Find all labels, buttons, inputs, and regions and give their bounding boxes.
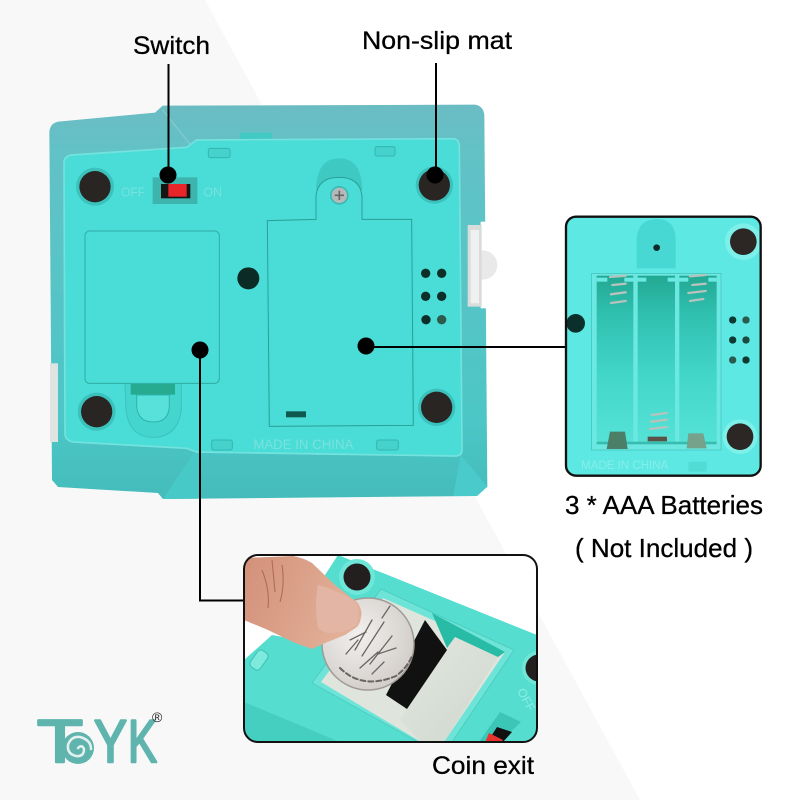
- small tab: [688, 462, 707, 472]
- stamp: MADE IN CHINA: [581, 458, 668, 472]
- device corner: [244, 555, 537, 742]
- coin door latch: [125, 383, 181, 437]
- foot right: [522, 652, 536, 684]
- MADE IN CHINA stamp: MADE IN CHINA: [253, 436, 354, 452]
- thumbnail: [316, 585, 359, 633]
- central hole: [237, 267, 259, 289]
- screw recess: [316, 158, 362, 190]
- OFF mark: OFF: [514, 686, 538, 714]
- ON label: ON: [203, 185, 222, 200]
- label: Non-slip mat: Non-slip mat: [362, 27, 512, 55]
- small moulded tabs: [208, 147, 398, 450]
- spring right: [688, 275, 706, 301]
- logo: TOYK: [37, 708, 163, 775]
- side hole: [566, 314, 585, 333]
- coin: [322, 598, 414, 690]
- label: Coin exit: Coin exit: [432, 752, 534, 780]
- finger: [244, 556, 362, 649]
- callout: switch: [160, 64, 176, 184]
- foot bottom: [723, 419, 757, 454]
- contact centre: [648, 437, 667, 441]
- rubber feet: [76, 166, 455, 431]
- device: underside of coin bank: [49, 105, 497, 499]
- label: ( Not Included ): ( Not Included ): [575, 533, 753, 563]
- spring centre: [648, 413, 667, 440]
- switch slot: [480, 712, 521, 741]
- speaker holes: [421, 269, 446, 324]
- window interior: [321, 598, 505, 742]
- battery bay: [592, 273, 721, 450]
- battery door: [267, 177, 413, 426]
- spring left: [610, 276, 626, 303]
- switch: [153, 177, 197, 204]
- black slot: [386, 620, 447, 709]
- foot top: [339, 559, 375, 595]
- logo spiral: [62, 732, 94, 764]
- logo: TOYK: Y: [94, 708, 127, 775]
- grey plate: [419, 657, 498, 741]
- label: 3 * AAA Batteries: 3 * AAA Batteries: [565, 490, 763, 520]
- lower left band: [244, 702, 340, 742]
- callout: coin exit: [192, 342, 245, 600]
- contact left: [607, 432, 628, 449]
- logo: TOYK: ®: [152, 709, 163, 725]
- label: Switch: Switch: [133, 32, 210, 60]
- knuckle creases: [262, 560, 283, 608]
- contact right: [687, 433, 707, 448]
- panel: battery compartment: [566, 217, 762, 476]
- panel: coin exit photo: [244, 555, 556, 745]
- screw: [330, 186, 349, 205]
- screw arch: [637, 219, 676, 268]
- door slot: [286, 411, 306, 417]
- inner plate: [64, 139, 462, 456]
- small tab: [250, 650, 268, 670]
- OFF label: OFF: [121, 185, 145, 200]
- callout: non-slip mat: [426, 63, 444, 184]
- logo: TOYK: K: [128, 708, 157, 775]
- foot top: [725, 223, 762, 260]
- speaker holes: [729, 316, 750, 364]
- raised window rim: [312, 589, 514, 742]
- coin door: [85, 231, 219, 383]
- teal inner wall: [432, 613, 505, 657]
- screw hole: [653, 244, 660, 251]
- callout: battery compartment: [358, 338, 567, 354]
- logo: TOYK: T: [37, 708, 83, 775]
